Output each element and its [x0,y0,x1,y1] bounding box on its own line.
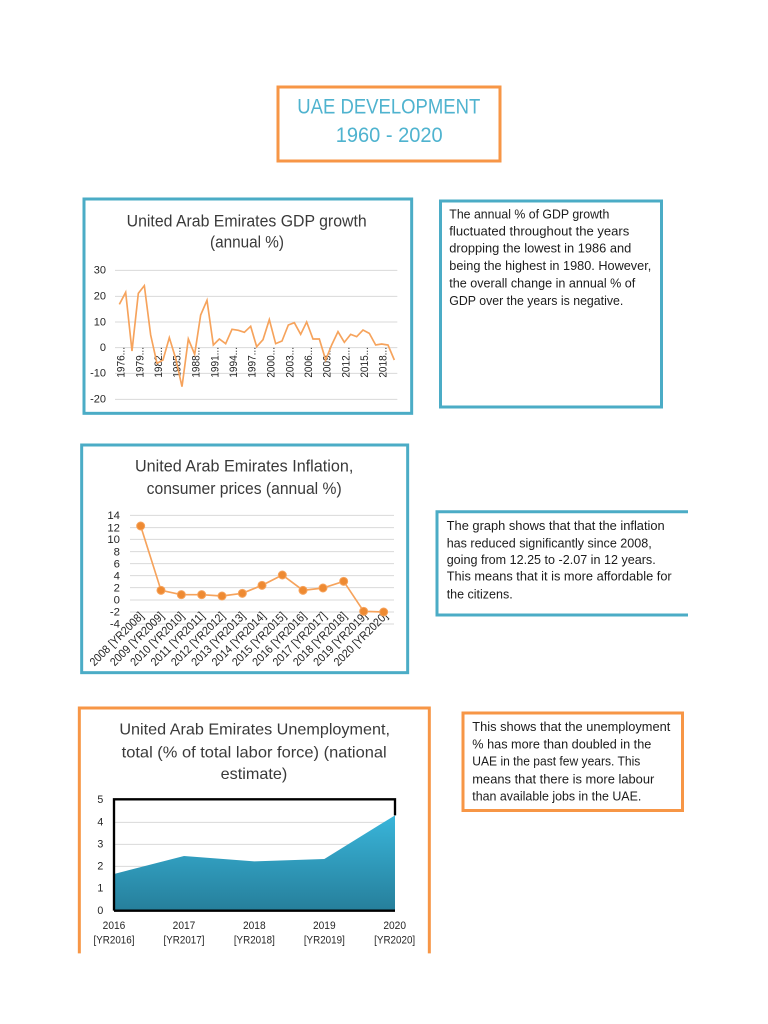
x axis labels: 2017 [YR2017] [270,610,329,669]
title box: UAE DEVELOPMENT [297,95,480,119]
x axis labels: 2015 [YR2015] [230,610,289,669]
x axis labels: 2009... [322,347,334,378]
text box: inflation commentary: the citizens. [447,586,513,601]
y axis labels: 20 [94,291,106,303]
x axis labels: [YR2017] [163,934,205,946]
x axis labels: 2017 [173,920,195,932]
x axis labels [116,347,390,378]
y axis labels: 10 [107,534,120,546]
text box: inflation commentary: going from 12.25 to -2.07 in 12 years. [447,552,656,567]
x axis labels [93,920,415,946]
x axis labels: 1979... [134,347,146,378]
text box: unemployment commentary [463,713,682,810]
y axis labels: 8 [114,546,120,558]
y axis labels: 14 [107,510,120,522]
area series: unemployment [114,815,395,911]
heading: inflation: consumer prices (annual %) [147,480,342,498]
text box: inflation commentary [437,512,688,615]
x axis labels: [YR2019] [304,934,345,946]
y axis labels: 4 [114,570,120,582]
y axis labels: 6 [114,558,120,570]
y axis labels: 0 [100,342,106,354]
text box: GDP commentary: The annual % of GDP growth [449,206,609,221]
x axis labels: 2012... [340,347,352,378]
x axis labels: 2010 [YR2010] [128,610,187,669]
heading: GDP growth: United Arab Emirates GDP growth [127,213,367,231]
y axis labels [107,510,120,631]
x axis labels: 1982... [153,347,165,378]
x axis labels: [YR2016] [93,934,135,946]
y axis labels: 2 [114,582,120,594]
text box: inflation commentary: This means that it is more affordable for [447,569,672,584]
heading: inflation [135,458,353,498]
y axis labels: -20 [90,394,106,406]
title box: 1960 - 2020 [336,123,443,147]
text box: GDP commentary: fluctuated throughout the years [449,224,629,239]
x axis labels: 1994... [228,347,240,378]
x axis labels: 1988... [190,347,202,378]
heading: unemployment [119,721,390,783]
y axis labels [97,794,103,917]
x axis labels: 2019 [313,920,336,932]
x axis labels: 2018 [243,920,266,932]
text box: GDP commentary: dropping the lowest in 1986 and [449,241,631,256]
text box: inflation commentary: has reduced significantly since 2008, [447,535,652,550]
x axis labels: 2000... [265,347,277,378]
y axis labels: 1 [97,883,103,895]
x axis labels: 2019 [YR2019] [311,610,370,669]
heading: unemployment: estimate) [221,766,287,783]
x axis labels: 2009 [YR2009] [108,610,167,669]
y axis labels: 4 [97,817,103,829]
y axis labels: 2 [97,861,103,873]
y axis labels: 12 [107,522,120,534]
text box: inflation commentary: The graph shows that that the inflation [447,518,665,533]
text box: unemployment commentary: This shows that the unemployment [472,719,671,734]
x axis labels: [YR2020] [374,934,415,946]
text box: GDP commentary: the overall change in annual % of [449,275,636,290]
panel: GDP growth chart [84,199,412,413]
x axis labels: 1991... [209,347,221,378]
text box: unemployment commentary: means that there is more labour [472,771,655,786]
y axis labels: 0 [97,905,103,917]
text box: GDP commentary [440,201,662,407]
y axis labels: -4 [110,619,120,631]
x axis labels: 2006... [303,347,315,378]
x axis labels: 1985... [172,347,184,378]
x axis labels: 2020 [YR2020] [331,610,390,669]
heading: GDP growth [127,213,367,252]
text box: unemployment commentary: UAE in the past few years. This [472,754,640,769]
panel: unemployment chart [79,708,429,953]
y axis labels: -10 [90,368,106,380]
x axis labels [87,610,390,669]
x axis labels: 2003... [284,347,296,378]
y axis labels: 0 [114,595,120,607]
heading: unemployment: United Arab Emirates Unemployment, [119,721,390,738]
x axis labels: 2020 [383,920,406,932]
y axis labels: 5 [97,794,103,806]
text box: unemployment commentary: % has more than doubled in the [472,736,651,751]
line series: inflation [137,522,388,616]
x axis labels: 2014 [YR2014] [209,610,268,669]
plot frame [114,799,395,911]
y axis labels: 10 [94,316,106,328]
x axis labels: 2018 [YR2018] [291,610,350,669]
panel: inflation chart [82,445,408,673]
heading: inflation: United Arab Emirates Inflation, [135,458,353,476]
line series: GDP growth [119,286,394,387]
x axis labels: 1976... [116,347,128,378]
x axis labels: 2016 [YR2016] [250,610,309,669]
x axis labels: 1997... [247,347,259,378]
text box: GDP commentary: GDP over the years is negative. [449,293,623,308]
x axis labels: 2008 [YR2008] [87,610,146,669]
x axis labels: 2011 [YR2011] [148,610,207,669]
heading: GDP growth: (annual %) [210,234,284,252]
x axis labels: 2018... [378,347,390,378]
x axis labels: 2013 [YR2013] [189,610,248,669]
text box: GDP commentary: being the highest in 1980. However, [449,258,651,273]
heading: unemployment: total (% of total labor force) (national [122,744,387,761]
x axis labels: 2015... [359,347,371,378]
y axis labels: 30 [94,265,106,277]
text box: unemployment commentary: than available jobs in the UAE. [472,789,641,804]
y axis labels [90,265,106,406]
x axis labels: 2016 [103,920,125,932]
x axis labels: [YR2018] [234,934,275,946]
y axis labels: 3 [97,839,103,851]
title box [278,87,500,161]
x axis labels: 2012 [YR2012] [169,610,228,669]
y axis labels: -2 [110,607,120,619]
